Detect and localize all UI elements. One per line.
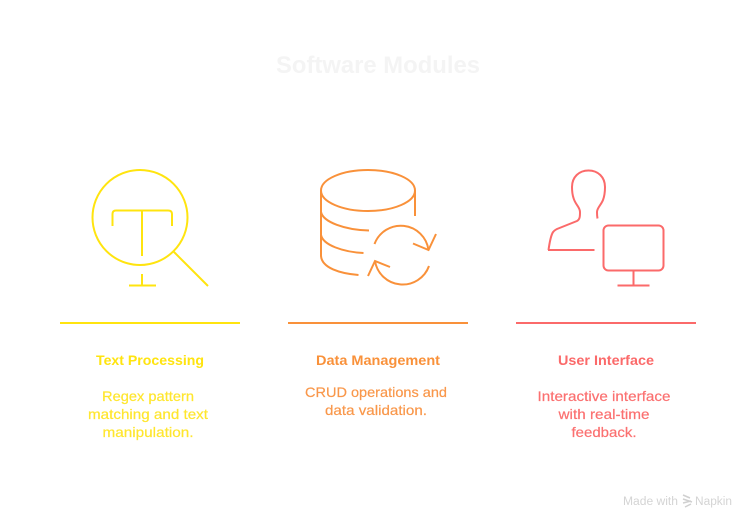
description: user interface: Interactive interface bbox=[538, 388, 671, 404]
panel: user interface bbox=[516, 170, 696, 440]
icon: database with sync arrows bbox=[321, 170, 436, 285]
divider: user interface bbox=[516, 322, 696, 324]
description: data management: data validation. bbox=[325, 402, 427, 418]
heading: text processing: Text Processing bbox=[96, 352, 204, 368]
icon: magnifying glass with T bbox=[92, 170, 208, 286]
icon: napkin logo bbox=[683, 495, 692, 507]
panel: data management bbox=[288, 170, 468, 418]
watermark: made with napkin bbox=[623, 495, 732, 508]
watermark: made with napkin: Napkin bbox=[695, 496, 732, 508]
description: user interface: feedback. bbox=[572, 424, 636, 440]
description: text processing: manipulation. bbox=[102, 424, 194, 440]
description: text processing: Regex pattern bbox=[102, 388, 194, 404]
description: text processing: matching and text bbox=[88, 406, 208, 422]
panel: text processing bbox=[60, 170, 240, 440]
description: user interface bbox=[538, 388, 671, 440]
description: text processing bbox=[88, 388, 208, 440]
divider: text processing bbox=[60, 322, 240, 324]
heading: user interface: User Interface bbox=[558, 352, 654, 368]
description: data management: CRUD operations and bbox=[305, 384, 447, 400]
divider: data management bbox=[288, 322, 468, 324]
heading: data management: Data Management bbox=[316, 352, 440, 368]
icon: user with monitor bbox=[548, 170, 664, 286]
description: data management bbox=[305, 384, 447, 418]
watermark: made with napkin: Made with bbox=[623, 496, 678, 508]
description: user interface: with real-time bbox=[557, 406, 650, 422]
title: Software Modules bbox=[276, 52, 480, 79]
